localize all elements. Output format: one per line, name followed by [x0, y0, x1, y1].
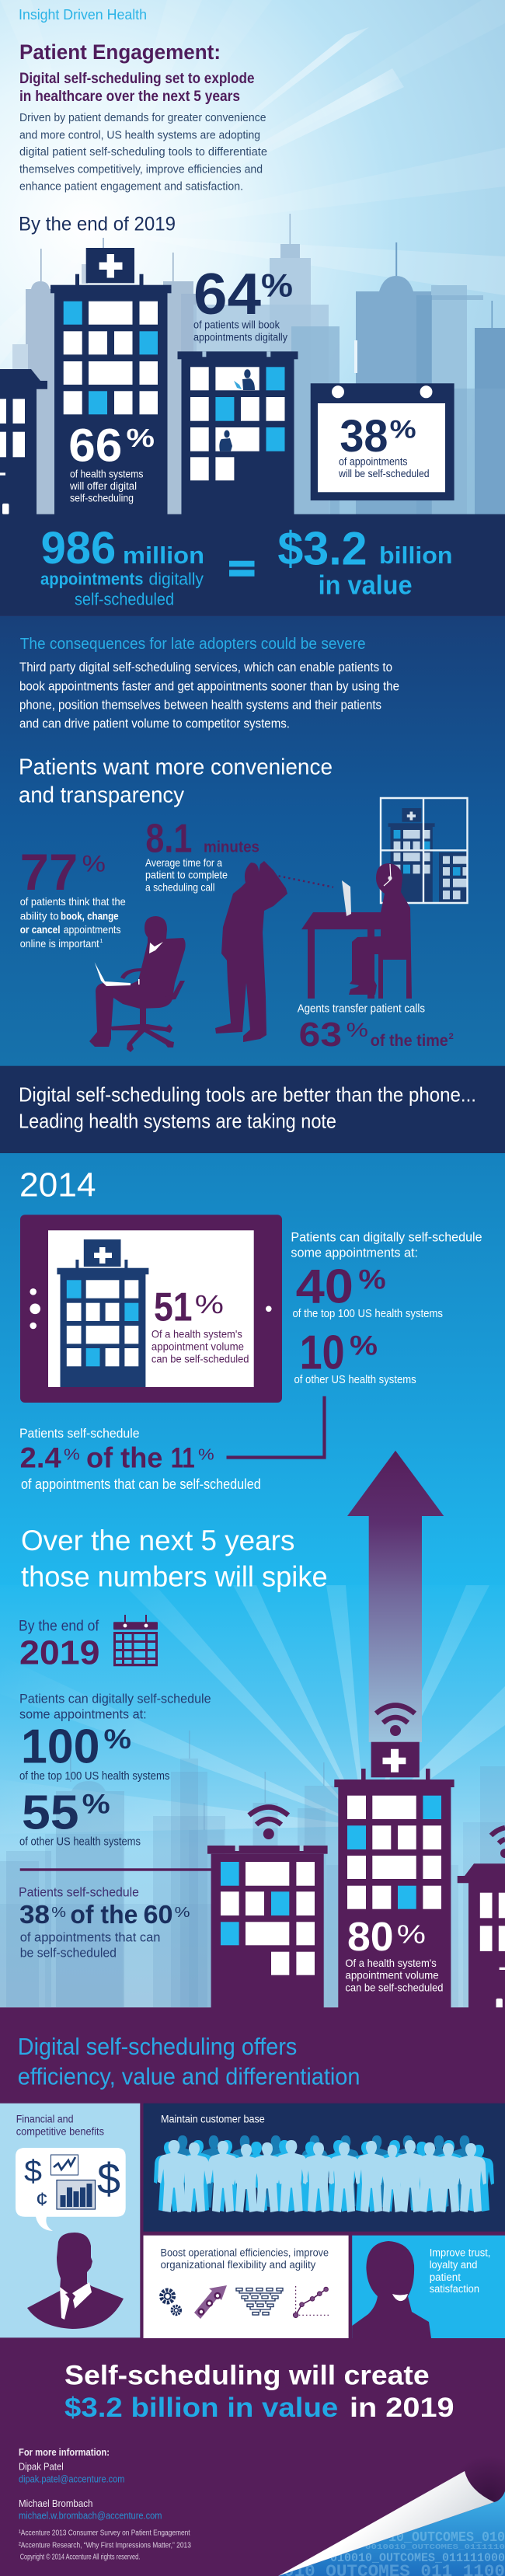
stat: 51% [152, 1285, 249, 1365]
heading: digital self-scheduling offers [18, 2033, 360, 2090]
panel: better than the phone band [0, 1066, 505, 1153]
icon: hospital on tablet [57, 1239, 148, 1387]
stat: 66%: 66 [68, 419, 122, 471]
icon: calendar [113, 1615, 158, 1666]
stat: 986 million appointments: million [123, 542, 204, 569]
section background: lower sky [0, 1585, 505, 2009]
contact information: dipak.patel@accenture.com [19, 2473, 124, 2484]
icon: gears [162, 2290, 180, 2314]
calendar with 38%: % [390, 415, 416, 443]
icon: speech bubble with finance symbols: $ [24, 2155, 42, 2188]
contact information: Michael Brombach [19, 2498, 92, 2509]
stat: agents transfer 63%: 2 [449, 1032, 454, 1041]
closing statement: in 2019 [350, 2393, 454, 2423]
stat: 80% [345, 1915, 443, 1994]
stat: agents transfer 63%: % [347, 1020, 368, 1041]
section background: benefits [0, 2007, 505, 2576]
stat: 38% of the 60% [19, 1885, 190, 1960]
heading: By the end of 2019: By the end of 2019 [19, 214, 176, 235]
intro paragraph [19, 111, 267, 193]
stat: 55%: of other US health systems [19, 1835, 141, 1848]
consequences paragraph [19, 660, 399, 731]
panel: improve trust, loyalty: loyalty and [430, 2259, 477, 2271]
stat: 77%: of patients think that the [20, 895, 126, 908]
text: patients can digitally self-schedule 2019 [19, 1692, 211, 1722]
dotted call line [279, 876, 333, 887]
title: Patient Engagement: [19, 40, 221, 64]
panel: better than the phone band: Digital self-scheduling tools are better than the phone... [19, 1082, 476, 1106]
section background: sky [0, 0, 505, 514]
illustration: standing patient on phone [215, 861, 287, 1042]
icon: speech bubble with finance symbols: ¢ [36, 2189, 48, 2210]
intro paragraph: themselves competitively, improve efficiencies and [19, 162, 263, 176]
stat: 80%: can be self-scheduled [345, 1982, 443, 1994]
stat: 64%: % [261, 267, 293, 304]
panel: maintain customer base: Maintain customer base [161, 2114, 265, 2125]
stat: 8.1 minutes [145, 817, 259, 894]
stat: 64%: appointments digitally [193, 332, 287, 343]
illustration: seated patient on laptop [89, 916, 186, 1052]
panel: value band [0, 514, 505, 616]
panel: financial and competitive benefits: competitive benefits [16, 2125, 104, 2137]
stat: 77%: book, change [61, 909, 119, 922]
stat: 8.1 minutes: Average time for a [145, 856, 222, 869]
icon: speech bubble with finance symbols: $ [97, 2154, 120, 2203]
panel: better than the phone band: Leading health systems are taking note [19, 1110, 336, 1133]
stat: 38% of the 60%: % [175, 1905, 190, 1920]
calendar with 38%: will be self-scheduled [338, 468, 430, 479]
stat: 51%: % [195, 1290, 224, 1319]
stat: 986 million appointments: digitally [149, 570, 204, 589]
stat: 2.4% of the 11%: 11 [171, 1441, 195, 1473]
icon: wifi above office [249, 1807, 288, 1839]
subtitle [19, 71, 255, 105]
stat: 2.4% of the 11%: Patients self-schedule [19, 1426, 140, 1441]
stat: agents transfer 63%: 63 [299, 1016, 342, 1054]
footnotes and copyright: Copyright © 2014 Accenture All rights reserved. [20, 2553, 140, 2561]
calendar with 38%: of appointments [339, 455, 408, 467]
stat: 77%: appointments [64, 923, 121, 936]
stat: 38% of the 60%: % [51, 1905, 66, 1920]
intro paragraph: digital patient self-scheduling tools to differentiate [19, 145, 267, 159]
stat: 77%: or cancel [20, 923, 61, 936]
stat: 8.1 minutes: patient to complete [145, 869, 228, 881]
stat: 10%: % [350, 1330, 378, 1361]
icon: line chart [293, 2286, 330, 2317]
text: patients can digitally self-schedule 2014: some appointments at: [291, 1245, 418, 1260]
icon: speech bubble with finance symbols [16, 2148, 126, 2231]
consequences paragraph: Third party digital self-scheduling services, which can enable patients to [19, 660, 392, 675]
stat: $3.2 billion in value [277, 523, 452, 600]
stat: 80%: appointment volume [345, 1969, 439, 1982]
stat: 2.4% of the 11% [19, 1426, 261, 1492]
stat: 51%: Of a health system's [152, 1328, 242, 1340]
stat: 80%: 80 [347, 1915, 394, 1960]
page curl [278, 2456, 505, 2576]
panel: financial and competitive benefits [0, 2104, 140, 2337]
consequences paragraph: book appointments faster and get appointments sooner than by using the [19, 678, 399, 693]
stat: 100%: of the top 100 US health systems [19, 1769, 169, 1783]
icon: organization chart [236, 2288, 283, 2315]
stat: agents transfer 63% [298, 1002, 454, 1054]
stat: 10% [294, 1326, 416, 1386]
stat: 77%: % [82, 852, 106, 877]
stat: 38% of the 60%: of the [70, 1900, 138, 1929]
panel: improve trust, loyalty: satisfaction [430, 2283, 479, 2295]
heading: patients want: and transparency [19, 783, 184, 808]
contact information: Dipak Patel [19, 2460, 64, 2472]
stat: 51%: appointment volume [152, 1340, 244, 1352]
stat: 77%: 1 [99, 939, 103, 944]
stat: 77%: online is important [20, 937, 99, 950]
tablet with 51% [20, 1215, 282, 1403]
stat: 66% [68, 419, 155, 504]
stat: 66%: will offer digital [69, 480, 137, 492]
stat: 64%: 64 [193, 261, 261, 326]
stat: 38% of the 60%: Patients self-schedule [19, 1885, 139, 1900]
heading: by the end of 2019: By the end of [19, 1618, 99, 1634]
panel: boost operational efficiencies: organizational flexibility and agility [160, 2259, 316, 2271]
stat: 77% [20, 843, 126, 950]
stat: 66%: self-scheduling [70, 492, 134, 504]
calendar with 38%: 38 [340, 411, 388, 462]
stat: 986 million appointments: appointments [40, 570, 143, 589]
intro paragraph: Driven by patient demands for greater convenience [19, 111, 266, 124]
consequences paragraph: phone, position themselves between health systems and their patients [19, 697, 381, 712]
stat: 40% [292, 1260, 443, 1320]
page curl: 0010010_OUTCOMES_0111110 [365, 2543, 505, 2551]
equals sign [229, 561, 255, 577]
footnotes and copyright [19, 2529, 191, 2561]
icon: person in window [219, 430, 232, 451]
stat: $3.2 billion in value: billion [379, 542, 452, 569]
illustration: smiling patient [352, 2241, 431, 2338]
skyline background, upper section [12, 214, 505, 514]
heading: consequences: The consequences for late adopters could be severe [20, 636, 366, 653]
stat: agents transfer 63%: Agents transfer patient calls [298, 1002, 425, 1015]
divider line to building [20, 1868, 211, 1871]
heading: over the next 5 years: those numbers will spike [21, 1561, 328, 1593]
intro paragraph: and more control, US health systems are adopting [19, 128, 260, 141]
stat: 66%: % [126, 424, 155, 452]
stat: 8.1 minutes: minutes [204, 839, 259, 856]
section background: consequences [0, 616, 505, 1066]
connector line [227, 1396, 325, 1458]
section background: 2014 [0, 1153, 505, 1588]
heading: over the next 5 years [21, 1525, 328, 1593]
stat: 2.4% of the 11%: 2.4 [20, 1441, 61, 1473]
stat: 2.4% of the 11%: % [64, 1446, 80, 1463]
stat: 38% of the 60%: 38 [19, 1900, 50, 1929]
stat: 2.4% of the 11%: of the [86, 1441, 162, 1473]
stat: 986 million appointments: 986 [41, 523, 116, 573]
contact information: For more information: [19, 2446, 110, 2458]
icon: person with tablet [234, 369, 255, 390]
heading: digital self-scheduling offers: efficiency, value and differentiation [18, 2063, 360, 2090]
stat: 2.4% of the 11%: of appointments that can be self-scheduled [21, 1476, 261, 1492]
stat: 10%: 10 [300, 1326, 345, 1380]
panel: boost operational efficiencies: Boost operational efficiencies, improve [160, 2247, 329, 2258]
subtitle: in healthcare over the next 5 years [19, 89, 240, 105]
stat: 51%: can be self-scheduled [152, 1352, 249, 1365]
stat: 40%: 40 [296, 1260, 354, 1314]
arrow: growth [347, 1451, 444, 1742]
stat: 8.1 minutes: a scheduling call [145, 881, 214, 894]
closing statement: Self-scheduling will create [64, 2360, 430, 2390]
contact information: michael.w.brombach@accenture.com [19, 2510, 162, 2522]
heading: digital self-scheduling offers: Digital self-scheduling offers [18, 2033, 297, 2060]
stat: 2.4% of the 11%: % [198, 1446, 214, 1463]
stat: $3.2 billion in value: in value [319, 570, 413, 600]
stat: 10%: of other US health systems [294, 1373, 416, 1386]
illustration: agent at desk [301, 863, 412, 999]
heading: over the next 5 years: Over the next 5 years [21, 1525, 294, 1556]
stat: 38% of the 60%: of appointments that can [20, 1929, 161, 1944]
stat: 100%: % [104, 1724, 131, 1755]
stat: $3.2 billion in value: $3.2 [277, 523, 367, 575]
illustration: businessman bust [27, 2233, 124, 2329]
stat: 986 million appointments [40, 523, 204, 608]
building: hospital with 66% [50, 248, 171, 514]
stat: 66%: of health systems [70, 468, 144, 479]
stat: 77%: ability to [20, 909, 59, 922]
stat: 38% of the 60%: 60 [143, 1900, 173, 1929]
stat: 55%: % [82, 1789, 110, 1819]
stat: 40%: of the top 100 US health systems [292, 1307, 443, 1320]
stat: 80%: % [397, 1920, 426, 1949]
calendar with 38% [311, 383, 454, 500]
stat: 100%: 100 [21, 1720, 99, 1773]
crowd silhouettes [154, 2135, 494, 2212]
stat: 55% [19, 1786, 141, 1848]
heading: by the end of 2019: 2019 [19, 1634, 99, 1672]
panel: boost operational efficiencies [143, 2236, 349, 2338]
subtitle: Digital self-scheduling set to explode [19, 71, 255, 87]
closing statement [64, 2360, 454, 2423]
text: patients can digitally self-schedule 2019: Patients can digitally self-schedule [19, 1692, 211, 1706]
stat: 64% [193, 261, 293, 343]
stat: agents transfer 63%: of the time [371, 1032, 448, 1050]
stat: 77%: 77 [20, 843, 78, 901]
text: patients can digitally self-schedule 2014 [291, 1229, 482, 1260]
heading: by the end of 2019 [19, 1618, 99, 1672]
window with hospital view [381, 798, 468, 903]
stat: 40%: % [358, 1264, 386, 1295]
stat: 55%: 55 [22, 1786, 79, 1839]
panel: financial and competitive benefits: Financial and [16, 2114, 74, 2125]
stat: 100% [19, 1720, 169, 1783]
contact information [19, 2446, 162, 2522]
text: patients can digitally self-schedule 2014: Patients can digitally self-schedule [291, 1229, 482, 1244]
stat: 64%: of patients will book [193, 319, 280, 331]
panel: improve trust, loyalty: Improve trust, [430, 2247, 490, 2258]
heading: 2014: 2014 [19, 1166, 96, 1204]
consequences paragraph: and can drive patient volume to competitor systems. [19, 716, 290, 731]
icon: wifi above hospital [376, 1705, 415, 1736]
header: Insight Driven Health: Insight Driven Health [19, 7, 147, 23]
building: left edge [0, 369, 47, 514]
text: patients can digitally self-schedule 2019: some appointments at: [19, 1707, 147, 1722]
skyline background, lower section [0, 1731, 505, 2007]
footnotes and copyright: ¹Accenture 2013 Consumer Survey on Patient Engagement [19, 2529, 190, 2538]
building: office with patients [177, 351, 298, 514]
icon: arrow with process steps [194, 2285, 227, 2319]
heading: patients want [19, 755, 333, 808]
stat: 80%: Of a health system's [345, 1957, 437, 1969]
heading: patients want: Patients want more convenience [19, 755, 333, 780]
building: purple right edge [458, 1828, 505, 2010]
building: purple office [207, 1846, 328, 2009]
stat: 51%: 51 [154, 1285, 193, 1330]
footnotes and copyright: ²Accenture Research, “Why First Impressions Matter,” 2013 [19, 2541, 191, 2550]
closing statement: $3.2 billion in value [64, 2393, 338, 2423]
building: purple hospital with 80% [334, 1742, 454, 2009]
stat: 8.1 minutes: 8.1 [145, 817, 192, 862]
panel: maintain customer base [143, 2104, 505, 2232]
panel: improve trust, loyalty: patient [430, 2271, 461, 2283]
intro paragraph: enhance patient engagement and satisfaction. [19, 180, 243, 193]
stat: 38% of the 60%: be self-scheduled [20, 1945, 117, 1960]
stat: 986 million appointments: self-scheduled [75, 589, 174, 608]
panel: improve trust, loyalty [352, 2236, 505, 2338]
